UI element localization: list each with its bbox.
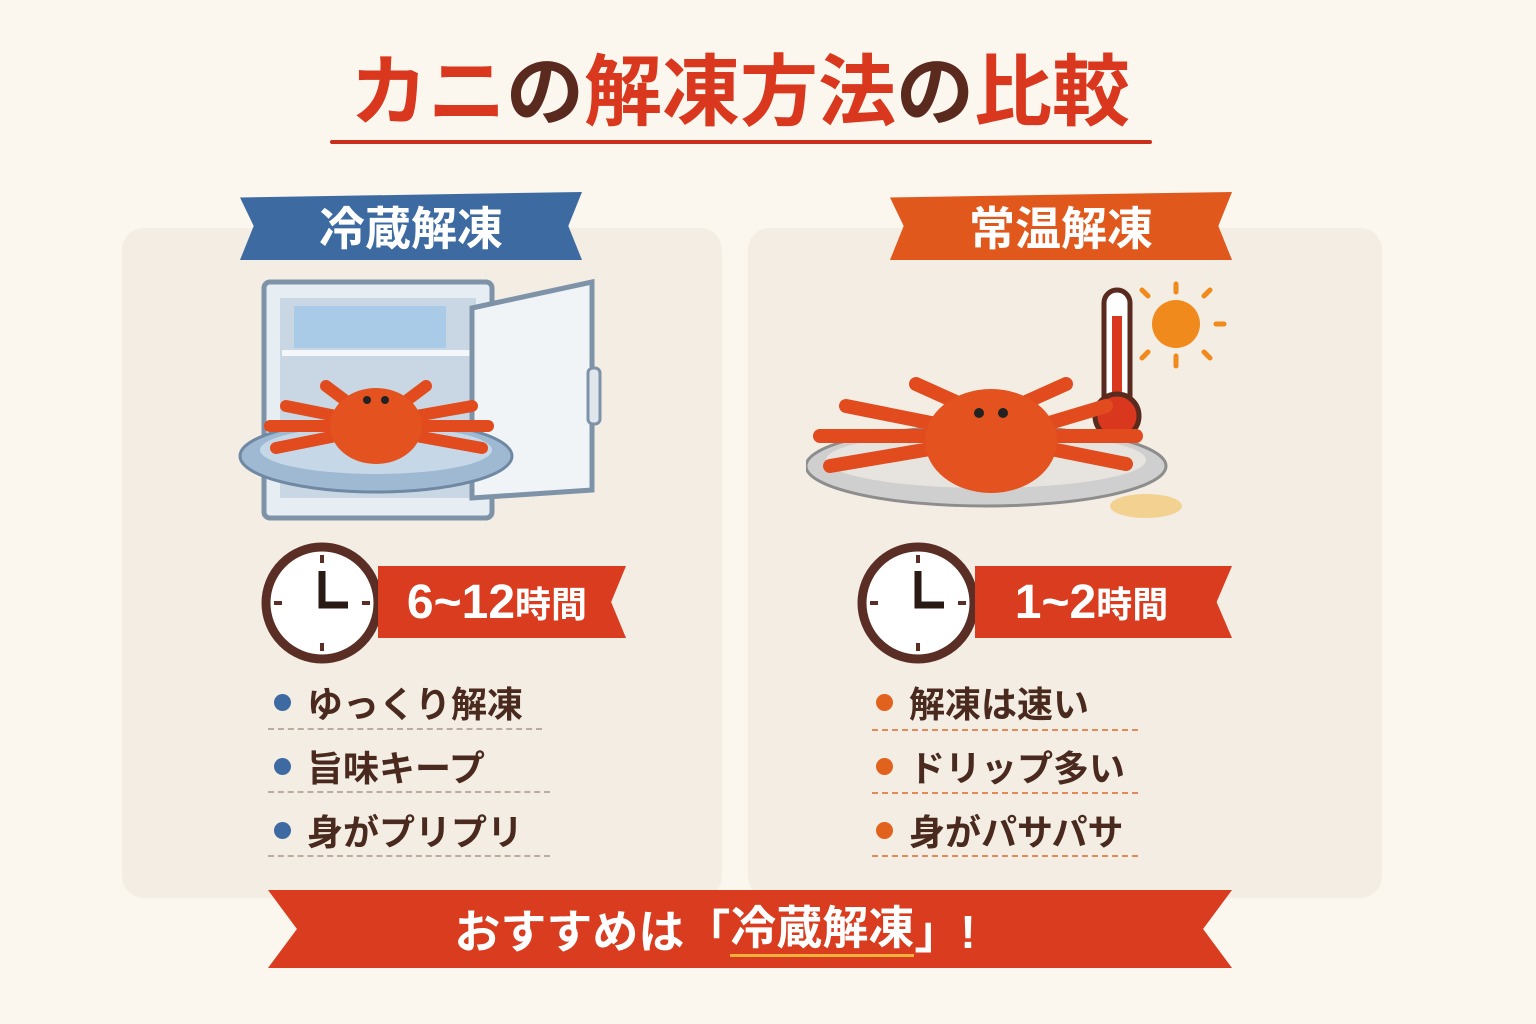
list: right bullets: ドリップ多い xyxy=(909,748,1125,789)
heading: 常温解凍 xyxy=(890,192,1232,260)
list: right bullets: 解凍は速い xyxy=(909,684,1089,725)
bottom banner: recommendation: 冷蔵解凍 xyxy=(730,902,914,954)
icon: clock left xyxy=(262,542,378,664)
time badge left xyxy=(378,566,626,638)
list: left bullets: 旨味キープ xyxy=(307,748,485,789)
heading: 冷蔵解凍: 冷蔵解凍 xyxy=(319,203,503,255)
panel: refrigerator thawing xyxy=(122,228,722,898)
list: left bullets: ゆっくり解凍 xyxy=(307,684,523,725)
title: カニの解凍方法の比較 xyxy=(350,48,1130,136)
heading: 冷蔵解凍 xyxy=(240,192,582,260)
list: left bullets xyxy=(268,684,550,857)
time badge right: 1~2 xyxy=(1015,576,1096,628)
panel: room temperature thawing xyxy=(748,228,1382,898)
time badge right: 時間 xyxy=(1096,584,1168,625)
illustration: fridge with crab xyxy=(238,278,602,520)
bottom banner: recommendation: おすすめは「 」! xyxy=(454,906,976,958)
bottom banner: recommendation xyxy=(268,890,1232,968)
time badge left: 6~12 xyxy=(407,576,515,628)
icon: clock right xyxy=(858,542,975,664)
time badge left: 時間 xyxy=(515,584,587,625)
heading: 常温解凍: 常温解凍 xyxy=(969,203,1153,255)
list: right bullets xyxy=(872,684,1138,857)
list: right bullets: 身がパサパサ xyxy=(909,812,1124,853)
list: left bullets: 身がプリプリ xyxy=(307,812,523,853)
illustration: crab at room temperature with thermometer and sun xyxy=(806,282,1226,518)
time badge right xyxy=(975,566,1232,638)
